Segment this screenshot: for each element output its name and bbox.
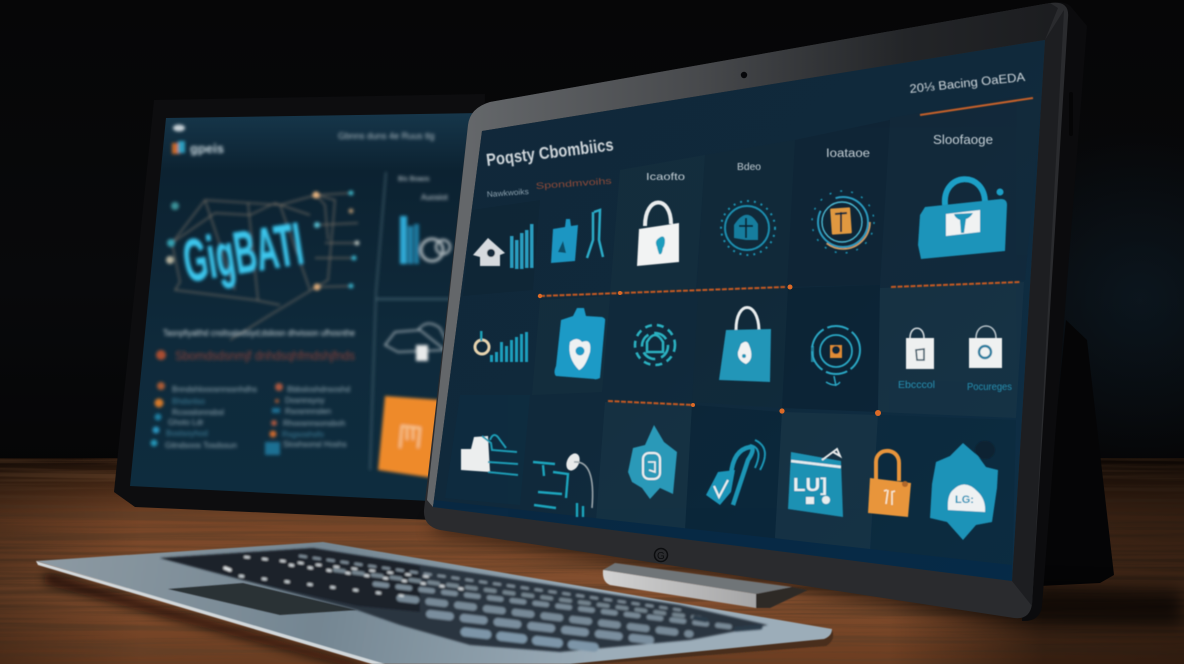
- icon: blue tag and chair: [551, 210, 603, 263]
- legend lists: Ghoto Ldr: [168, 418, 204, 427]
- keyboard shadow: [45, 572, 375, 664]
- trackpad: [168, 583, 357, 615]
- back tablet content: [150, 124, 455, 478]
- icon: circle with small orange square: [811, 326, 860, 386]
- icon: dashed lock ring: [635, 325, 675, 365]
- icon: orange bag: [868, 451, 911, 517]
- icon: house and bars: [473, 224, 534, 269]
- icon: two white bags with labels: Ebcccol: [898, 379, 935, 391]
- side panel frame: [370, 172, 386, 470]
- key deck: [160, 548, 768, 652]
- front tablet: [424, 2, 1184, 625]
- row 1 icons: [473, 179, 1007, 269]
- icon: white block with lines: [461, 435, 518, 475]
- front tablet body: [424, 3, 1068, 618]
- column labels: Nawkwoiks: [487, 187, 529, 199]
- legend lists: Bostsoyhod: [166, 429, 208, 438]
- legend lists: Bhdsnlso: [172, 397, 205, 406]
- icon: orange circuit ring: [812, 191, 874, 253]
- webcam: [741, 72, 747, 78]
- bottom logo: G: [657, 551, 665, 562]
- headline on network diagram: GigBATI: [179, 210, 308, 295]
- legend lists: Dosnnsyoy: [285, 396, 325, 405]
- side buttons: [1069, 92, 1073, 136]
- orange tile: [378, 396, 441, 478]
- icon: large blue bag: [918, 179, 1007, 259]
- back tablet screen: [130, 113, 482, 503]
- column labels: [487, 133, 993, 199]
- folding stand behind front tablet: [1040, 320, 1114, 586]
- column labels: Bdeo: [737, 161, 761, 173]
- side bar chart: Bis Boaos: [398, 176, 430, 183]
- network nodes: [166, 190, 360, 290]
- right bezel: [1012, 10, 1064, 606]
- silver tablet stand foot: [603, 563, 808, 608]
- description text: Sbomdsdsnmjf dnhdsqhfmdshjfnds: [175, 348, 355, 363]
- icon: shield badge: [628, 425, 677, 499]
- icon: two white bags with labels: [898, 326, 1012, 393]
- legend lists: Rsgsoshsfo: [282, 430, 324, 439]
- icon: white padlock: [637, 202, 679, 266]
- legend lists: Gitndsoos Tosdssun: [165, 441, 237, 450]
- icon: circuit with white bulb: [533, 451, 593, 517]
- icon: blue ring badge: [721, 201, 775, 255]
- side bar chart: Auosiot: [421, 193, 448, 202]
- front tablet screen: [433, 40, 1045, 581]
- icon: blue card with pen: [788, 449, 843, 517]
- dark upper keys: [160, 548, 420, 612]
- screen cells: [433, 326, 937, 572]
- column labels: Sloofaoge: [933, 133, 993, 147]
- header note: 20⅓ Bacing OaEDA: [909, 72, 1026, 96]
- icon: ring and bars: [475, 331, 528, 362]
- description text: Tasnpfiyalthd cnsltsalodsiyd;dsliosn dhvisson ufhosnthe: [163, 328, 355, 338]
- icon: teal hexagon badge: [930, 441, 998, 540]
- dark wall background: [0, 0, 1184, 475]
- icon: blue card with pen: LU]: [793, 475, 827, 495]
- wooden desk: [0, 458, 1184, 664]
- keys area: [160, 548, 768, 652]
- back tablet body: [114, 94, 485, 522]
- legend lists: Rhoosnnsonsboh: [283, 419, 345, 428]
- front tablet outer side: [1022, 2, 1087, 621]
- bottom logo: [654, 548, 668, 562]
- orange dashed dividers: [540, 98, 1033, 405]
- top bezel with silver highlight: [427, 3, 1058, 507]
- back header: gpeis: [190, 141, 224, 156]
- keyboard base: [36, 542, 832, 664]
- back tablet: [114, 94, 485, 522]
- front tablet shadow on desk: [430, 520, 1184, 625]
- row 3 icons: [461, 425, 998, 540]
- key rows: [225, 556, 760, 648]
- side line-art car icon: [385, 323, 448, 361]
- column labels: Spondmvoihs: [535, 176, 613, 191]
- keyboard bright lower edge: [36, 561, 385, 664]
- keyboard: [36, 542, 833, 664]
- back header: [172, 124, 435, 156]
- icon: two white bags with labels: Pocureges: [967, 381, 1012, 393]
- legend lists: Bnndshlooosnnssnhdhs: [172, 385, 257, 394]
- legend lists: Bbbsloshdnsoshd: [287, 385, 350, 394]
- column labels: Icaofto: [646, 171, 685, 183]
- network lines around headline: [172, 193, 358, 340]
- side bar chart: [398, 176, 450, 264]
- row 2 icons: [475, 308, 1012, 393]
- legend lists: Sloshsonsl Hoshs: [283, 440, 347, 449]
- icon: hook with tag: [706, 440, 765, 505]
- orange divider nodes: [538, 284, 881, 416]
- description text: [156, 328, 355, 363]
- column labels: Ioataoe: [826, 148, 870, 160]
- legend lists: Rsosnnnslen: [285, 407, 331, 416]
- legend lists: [150, 382, 350, 455]
- icon: blue tag with heart: [554, 308, 605, 379]
- back header: Gbnns duns 4e Ruus tlg: [338, 131, 435, 141]
- keyboard rim: [555, 630, 833, 664]
- title: Poqsty Cbombiics: [485, 134, 615, 170]
- icon: teal hexagon badge: LG:: [955, 494, 974, 506]
- icon: teal bag: [719, 308, 771, 382]
- legend lists: Rcooslonnsbsl: [172, 408, 224, 417]
